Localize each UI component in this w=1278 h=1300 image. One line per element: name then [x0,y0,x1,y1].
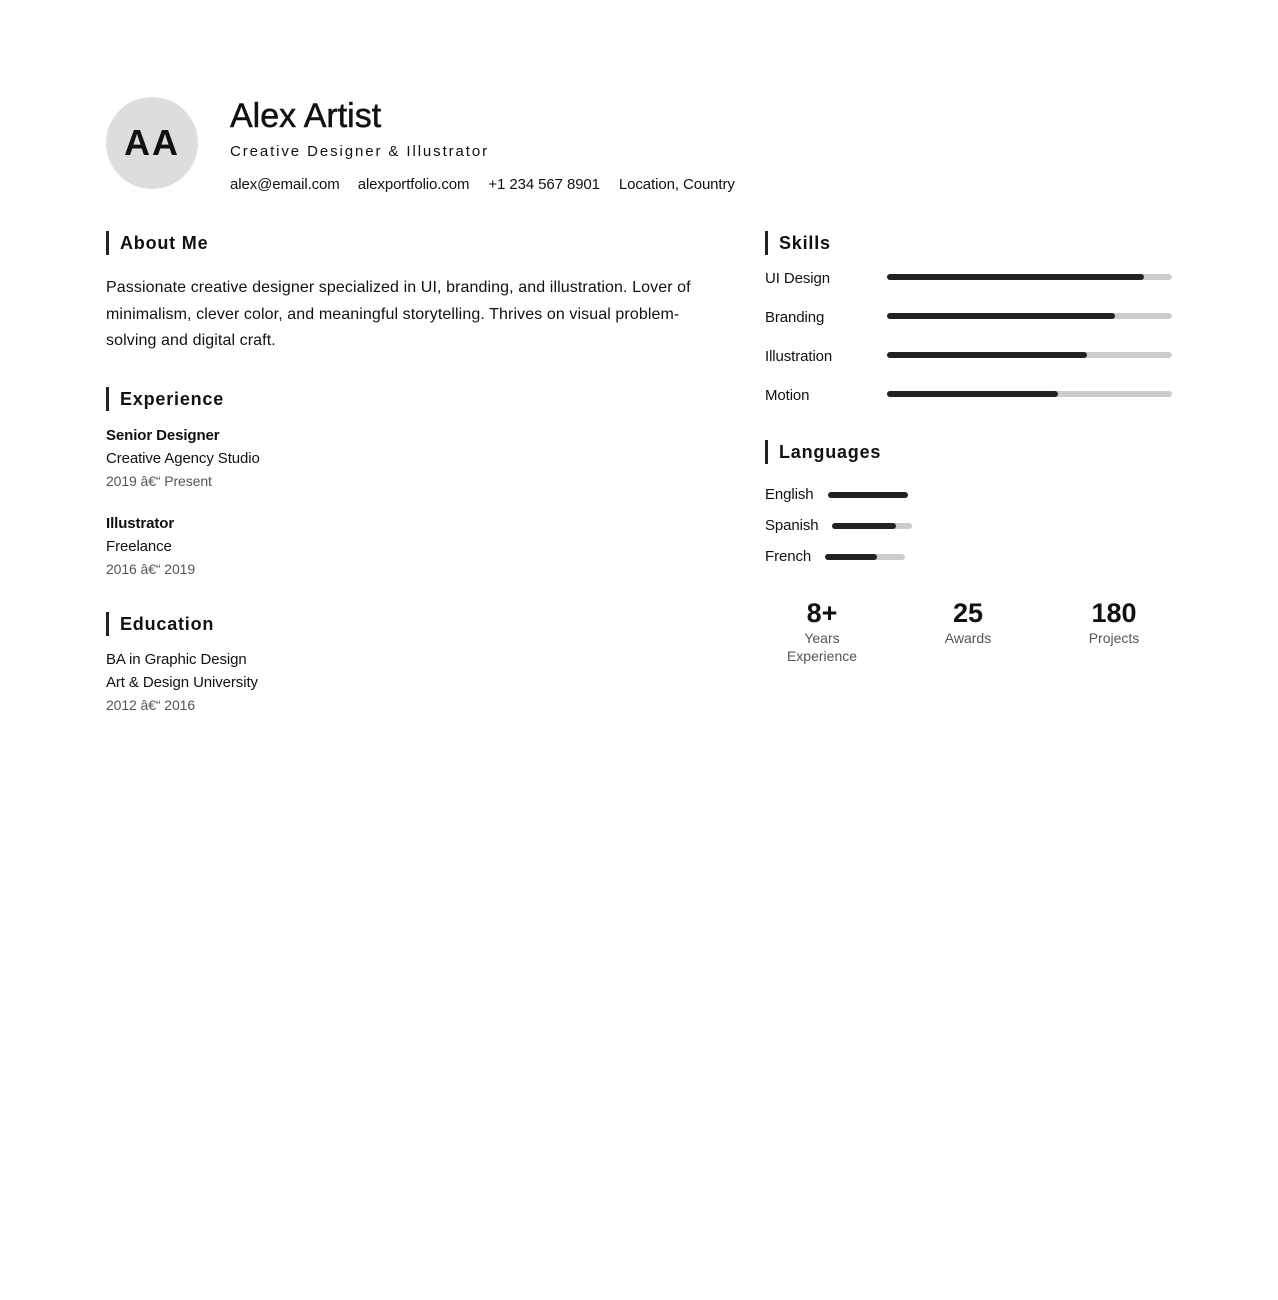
about text [106,279,691,349]
stat: projects: Projects [1089,630,1139,646]
skills list [765,270,1172,404]
heading: About Me: About Me [120,233,208,253]
job 2 [106,515,195,577]
education: Art & Design University [106,674,258,691]
education: 2012 â€“ 2016 [106,697,195,713]
stat: years [787,598,857,664]
job 2: Illustrator [106,515,174,532]
job 1: Creative Agency Studio [106,450,260,467]
heading: Skills: Skills [779,233,831,253]
skills list: Branding [765,309,824,326]
about text: solving and digital craft. [106,332,276,349]
skills list: Motion [765,387,809,404]
about text: Passionate creative designer specialized in UI, branding, and illustration. Lover of [106,279,691,296]
avatar: AA [124,122,180,163]
education [106,651,258,713]
stat: years: Years Experience [787,630,857,664]
job 1 [106,427,260,489]
stat: years: 8+ [807,598,837,628]
heading: Skills [765,231,831,255]
avatar [106,97,198,189]
languages list [765,486,912,565]
stat: awards [944,598,991,646]
stat: projects: 180 [1091,598,1137,628]
job 1: Senior Designer [106,427,220,444]
subtitle: Creative Designer & Illustrator [230,143,489,160]
heading: Experience: Experience [120,389,224,409]
stat: projects [1089,598,1139,646]
heading: Languages: Languages [779,442,881,462]
heading: Education: Education [120,614,214,634]
languages list: French [765,548,811,565]
skills list: UI Design [765,270,830,287]
job 2: 2016 â€“ 2019 [106,561,195,577]
education: BA in Graphic Design [106,651,247,668]
languages list: English [765,486,814,503]
name: Alex Artist [230,97,381,135]
stat: awards: Awards [945,630,991,646]
languages list: Spanish [765,517,819,534]
job 2: Freelance [106,538,172,555]
contact info: alex@email.com alexportfolio.com +1 234 567 8901 Location, Country [230,176,735,193]
job 1: 2019 â€“ Present [106,473,212,489]
skills list: Illustration [765,348,832,365]
about text: minimalism, clever color, and meaningful storytelling. Thrives on visual problem- [106,306,679,322]
stat: awards: 25 [953,598,983,628]
